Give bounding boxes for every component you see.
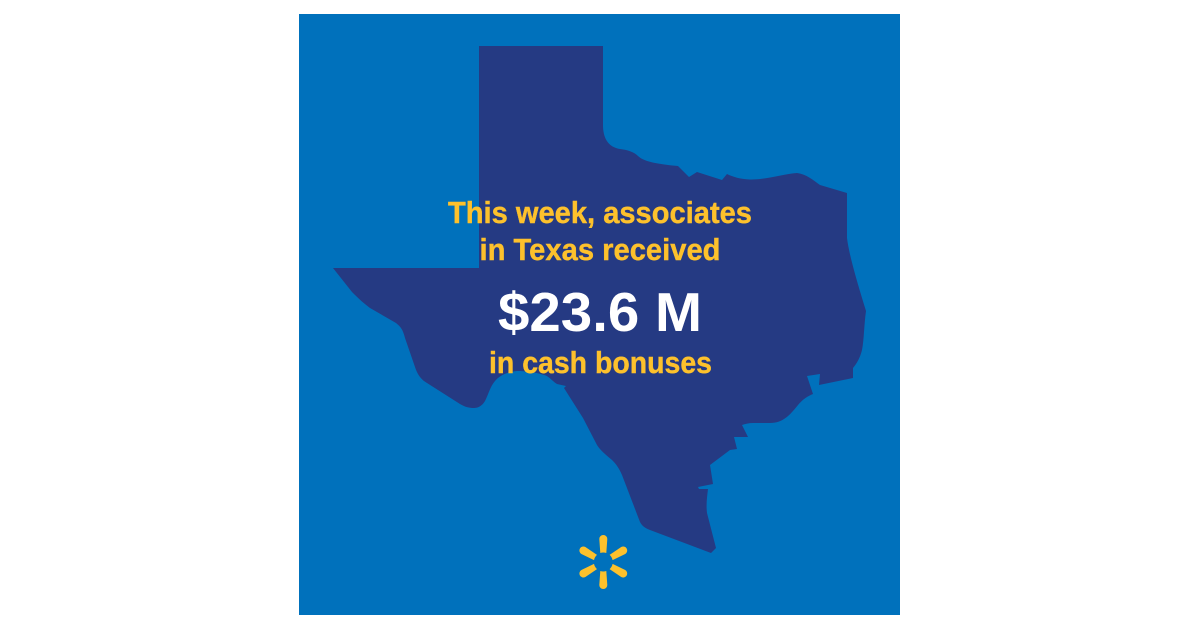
text: headline: in Texas received bbox=[480, 232, 720, 267]
panel: blue background bbox=[299, 14, 900, 615]
text: headline bbox=[448, 195, 752, 267]
map: Texas silhouette bbox=[333, 46, 866, 553]
text: in cash bonuses: in cash bonuses bbox=[489, 345, 712, 380]
icon: Walmart spark bbox=[578, 535, 629, 589]
text: headline: This week, associates bbox=[448, 195, 752, 230]
text: bonus amount: $23.6 M bbox=[498, 281, 702, 343]
